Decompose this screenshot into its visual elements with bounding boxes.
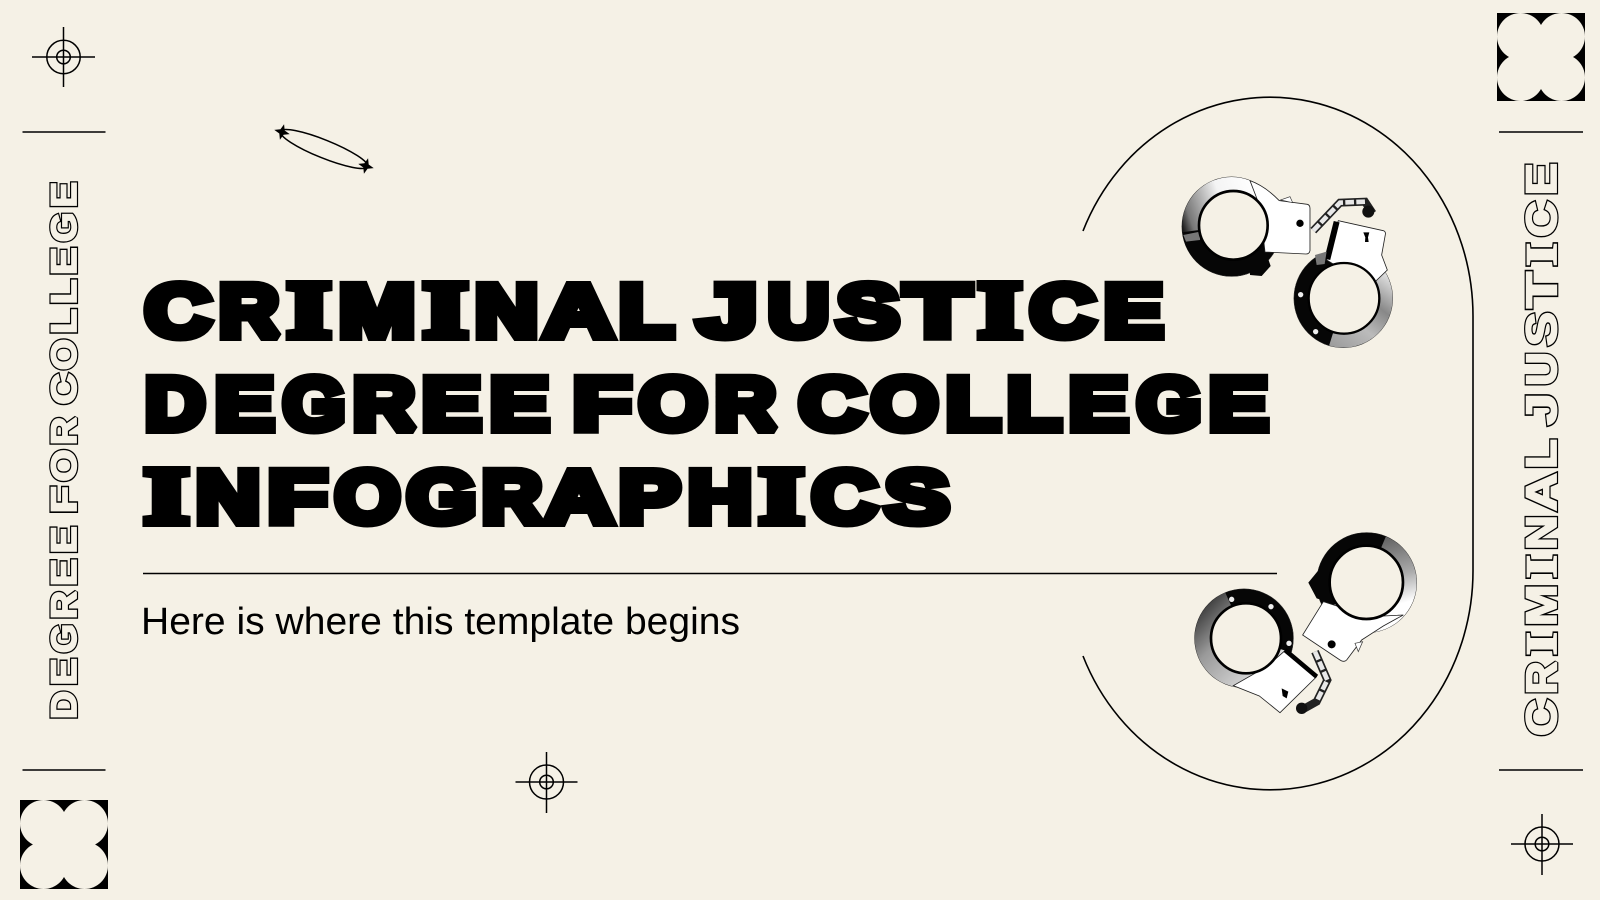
rounded outline frame [1083, 97, 1473, 790]
icon: quatrefoil bottom left [20, 800, 108, 889]
title line 1: R [219, 270, 279, 352]
vertical text: degree for college: O [45, 450, 84, 482]
title line 3: A [545, 456, 613, 538]
vertical text: criminal justice: E [1518, 163, 1566, 195]
upper cuff [1302, 532, 1417, 662]
vertical text: criminal justice: N [1518, 515, 1566, 550]
vertical text: degree for college: G [45, 624, 84, 653]
title line 1: I [288, 268, 330, 354]
vertical text: criminal justice: U [1518, 352, 1566, 386]
title line 2: E [490, 362, 549, 446]
title line 2: L [1007, 362, 1061, 446]
vertical text: criminal justice: C [1518, 699, 1566, 736]
vertical text: criminal justice: A [1518, 473, 1566, 511]
vertical text: degree for college: O [45, 339, 84, 370]
left cuff [1182, 176, 1310, 277]
vertical text: criminal justice: S [1518, 312, 1566, 346]
title rule [143, 572, 1277, 574]
vertical text: criminal justice: I [1519, 632, 1566, 655]
vertical text: degree for college: E [45, 526, 84, 553]
vertical text: criminal justice: I [1519, 632, 1566, 655]
vertical text: criminal justice: M [1518, 584, 1566, 626]
vertical text: criminal justice: I [1519, 243, 1566, 266]
vertical text: criminal justice: J [1518, 393, 1566, 425]
vertical text: degree for college: R [45, 417, 84, 445]
title line 1: L [619, 270, 672, 352]
vertical text: degree for college: D [45, 691, 84, 719]
title line 3: I [760, 454, 803, 540]
title line 3: S [885, 456, 949, 538]
vertical text: degree for college: L [45, 309, 84, 334]
vertical text: criminal justice: E [1518, 163, 1566, 195]
vertical text: criminal justice: A [1518, 473, 1566, 511]
title line 1: J [698, 270, 757, 352]
title line 2: G [283, 362, 345, 446]
title line 1: C [1030, 270, 1095, 352]
vertical text: degree for college: E [45, 559, 84, 586]
title line 1: E [1104, 270, 1163, 352]
vertical text: degree for college: E [45, 526, 84, 553]
vertical text: criminal justice: T [1518, 272, 1566, 308]
vertical text: degree for college: O [45, 450, 84, 482]
vertical text: degree for college: L [45, 279, 84, 304]
vertical text: criminal justice: R [1518, 661, 1566, 694]
title line 1: S [837, 270, 899, 352]
vertical text: criminal justice: R [1518, 661, 1566, 694]
vertical text: degree for college: F [45, 486, 84, 513]
vertical text: criminal justice: I [1519, 555, 1566, 578]
vertical text: degree for college: L [45, 309, 84, 334]
title line 1: N [475, 270, 538, 352]
title line 3: O [335, 456, 400, 538]
vertical text: degree for college: F [45, 486, 84, 513]
vertical text: degree for college: D [45, 691, 84, 719]
vertical text: degree for college: E [45, 658, 84, 685]
handcuffs bottom [1193, 520, 1418, 714]
icon: quatrefoil top right [1497, 13, 1585, 101]
title line 3: P [619, 456, 680, 538]
subtitle: Here is where this template begins [141, 601, 740, 643]
title line 2: E [215, 362, 274, 446]
title line 2: O [639, 362, 707, 446]
chain [1313, 202, 1374, 231]
vertical text: criminal justice: S [1518, 312, 1566, 346]
title line 2: D [145, 362, 205, 446]
title line 2: C [799, 362, 865, 446]
title line 2: R [715, 362, 776, 446]
vertical text: criminal justice: C [1518, 201, 1566, 237]
side rules [22, 132, 1583, 770]
title line 3: F [268, 456, 327, 538]
vertical text: criminal justice: L [1518, 440, 1566, 469]
vertical text: degree for college: R [45, 417, 84, 445]
title line 3: C [812, 456, 877, 538]
vertical text: degree for college: E [45, 182, 84, 208]
title line 2: O [871, 362, 938, 446]
title line 2: E [1069, 362, 1128, 446]
vertical text: degree for college: C [45, 374, 84, 404]
vertical text: criminal justice [1518, 163, 1566, 736]
title line 2: L [946, 362, 1000, 446]
icon: orbit with stars [272, 122, 376, 176]
vertical text: degree for college: E [45, 247, 84, 275]
vertical text: degree for college: E [45, 247, 84, 275]
vertical text: degree for college: E [45, 658, 84, 685]
vertical text: degree for college: G [45, 624, 84, 653]
vertical text: degree for college: O [45, 339, 84, 370]
vertical text: criminal justice: T [1518, 272, 1566, 308]
icon: crosshair top left [32, 27, 95, 87]
vertical text: criminal justice: N [1518, 515, 1566, 550]
title line 1: T [905, 270, 970, 352]
vertical text: degree for college: R [45, 591, 84, 619]
vertical text: degree for college [45, 182, 84, 719]
main title [145, 268, 1268, 540]
vertical text: degree for college: E [45, 559, 84, 586]
chain [1296, 652, 1327, 714]
vertical text: criminal justice: M [1518, 584, 1566, 626]
title line 2: R [353, 362, 415, 446]
vertical text: degree for college: C [45, 374, 84, 404]
title line 3: H [688, 456, 752, 538]
icon: crosshair bottom right [1511, 814, 1573, 875]
vertical text: degree for college: E [45, 182, 84, 208]
title line 1: I [424, 268, 467, 354]
title line 1: M [339, 270, 415, 352]
vertical text: criminal justice: C [1518, 699, 1566, 736]
vertical text: degree for college: L [45, 279, 84, 304]
vertical text: criminal justice: C [1518, 201, 1566, 237]
icon: crosshair bottom centre [516, 752, 578, 813]
vertical text: criminal justice: I [1519, 243, 1566, 266]
title line 1: U [768, 270, 829, 352]
vertical text: criminal justice: U [1518, 352, 1566, 386]
title line 1: I [979, 268, 1021, 354]
title line 2: E [422, 362, 481, 446]
vertical text: degree for college: G [45, 212, 84, 242]
title line 3: G [407, 456, 476, 538]
title line 2: G [1137, 362, 1201, 446]
title line 1: A [544, 270, 613, 352]
title line 3: R [482, 456, 542, 538]
right cuff [1290, 221, 1395, 353]
vertical text: criminal justice: L [1518, 440, 1566, 469]
vertical text: criminal justice: I [1519, 555, 1566, 578]
vertical text: degree for college: R [45, 591, 84, 619]
handcuffs top [1170, 175, 1395, 353]
title line 3: I [145, 454, 188, 540]
vertical text: degree for college: G [45, 212, 84, 242]
title line 3: N [196, 456, 260, 538]
title line 2: F [573, 362, 631, 446]
title line 1: C [145, 270, 211, 352]
vertical text: criminal justice: J [1518, 393, 1566, 425]
lower cuff [1194, 588, 1318, 714]
title line 2: E [1209, 362, 1268, 446]
